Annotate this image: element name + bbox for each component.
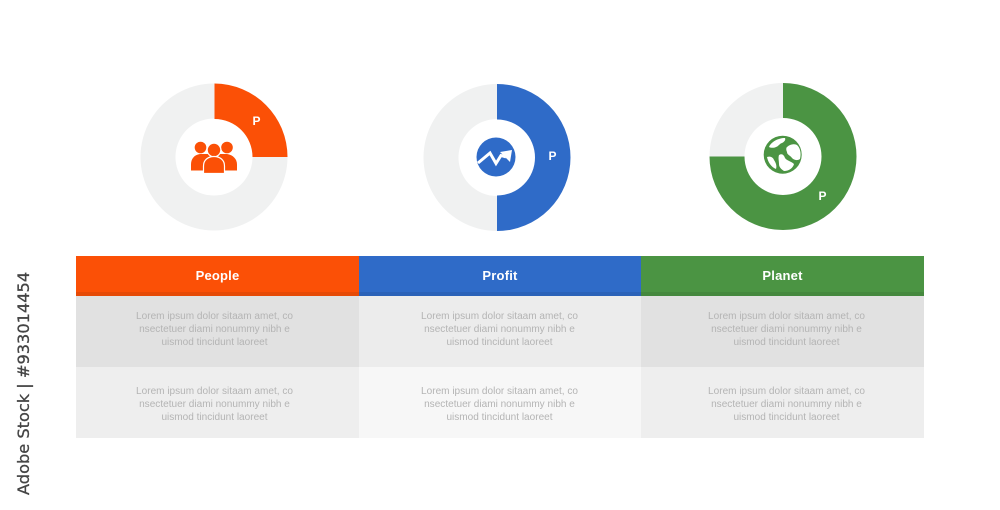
cell: profit row 2: uismod tincidunt laoreet (446, 412, 553, 423)
donut track: planet (710, 83, 857, 230)
panel: profit donut (424, 84, 571, 231)
panel: planet donut (710, 83, 857, 230)
icon: globe (764, 136, 802, 174)
segment letter: planet: P (818, 189, 827, 203)
cell: profit row 2: nsectetuer diami nonummy nibh e (424, 399, 575, 410)
cell: planet row 1: Lorem ipsum dolor sitaam amet, co (708, 311, 865, 322)
cell: people row 2: Lorem ipsum dolor sitaam amet, co (136, 386, 293, 397)
cell: profit row 1: nsectetuer diami nonummy nibh e (424, 324, 575, 335)
icon: growth chart badge (476, 138, 516, 176)
donut track: profit (424, 84, 571, 231)
header: planet: Planet (762, 268, 803, 283)
cell: profit row 2: Lorem ipsum dolor sitaam amet, co (421, 386, 578, 397)
segment letter: people: P (252, 114, 261, 128)
segment letter: profit: P (548, 149, 557, 163)
panel: table (76, 256, 924, 438)
cell: planet row 2: Lorem ipsum dolor sitaam amet, co (708, 386, 865, 397)
cell: profit row 2 (359, 367, 641, 438)
donut segment: planet 75% (710, 83, 856, 230)
cell: people row 1: uismod tincidunt laoreet (161, 337, 268, 348)
donut segment: profit 50% (497, 84, 570, 231)
cell: people row 1: nsectetuer diami nonummy nibh e (139, 324, 290, 335)
cell: planet row 2: nsectetuer diami nonummy nibh e (711, 399, 862, 410)
donut segment: people 25% (214, 84, 288, 157)
icon: people group (191, 142, 237, 174)
cell: planet row 1: uismod tincidunt laoreet (733, 337, 840, 348)
cell: profit row 1: uismod tincidunt laoreet (446, 337, 553, 348)
cell: planet row 2 (641, 367, 924, 438)
header: people: People (196, 268, 239, 283)
panel: people donut (141, 84, 288, 231)
header: profit (359, 256, 641, 296)
cell: people row 1: Lorem ipsum dolor sitaam amet, co (136, 311, 293, 322)
cell: people row 1 (76, 296, 359, 367)
header: people (76, 256, 359, 296)
cell: profit row 1 (359, 296, 641, 367)
cell: people row 2 (76, 367, 359, 438)
cell: profit row 1: Lorem ipsum dolor sitaam amet, co (421, 311, 578, 322)
cell: planet row 1: nsectetuer diami nonummy nibh e (711, 324, 862, 335)
cell: planet row 1 (641, 296, 924, 367)
cell: planet row 2: uismod tincidunt laoreet (733, 412, 840, 423)
cell: people row 2: nsectetuer diami nonummy nibh e (139, 399, 290, 410)
header: profit: Profit (482, 268, 518, 283)
donut track: people (141, 84, 288, 231)
cell: people row 2: uismod tincidunt laoreet (161, 412, 268, 423)
header: planet (641, 256, 924, 296)
stock id caption: Adobe Stock | #933014454 (14, 272, 33, 495)
